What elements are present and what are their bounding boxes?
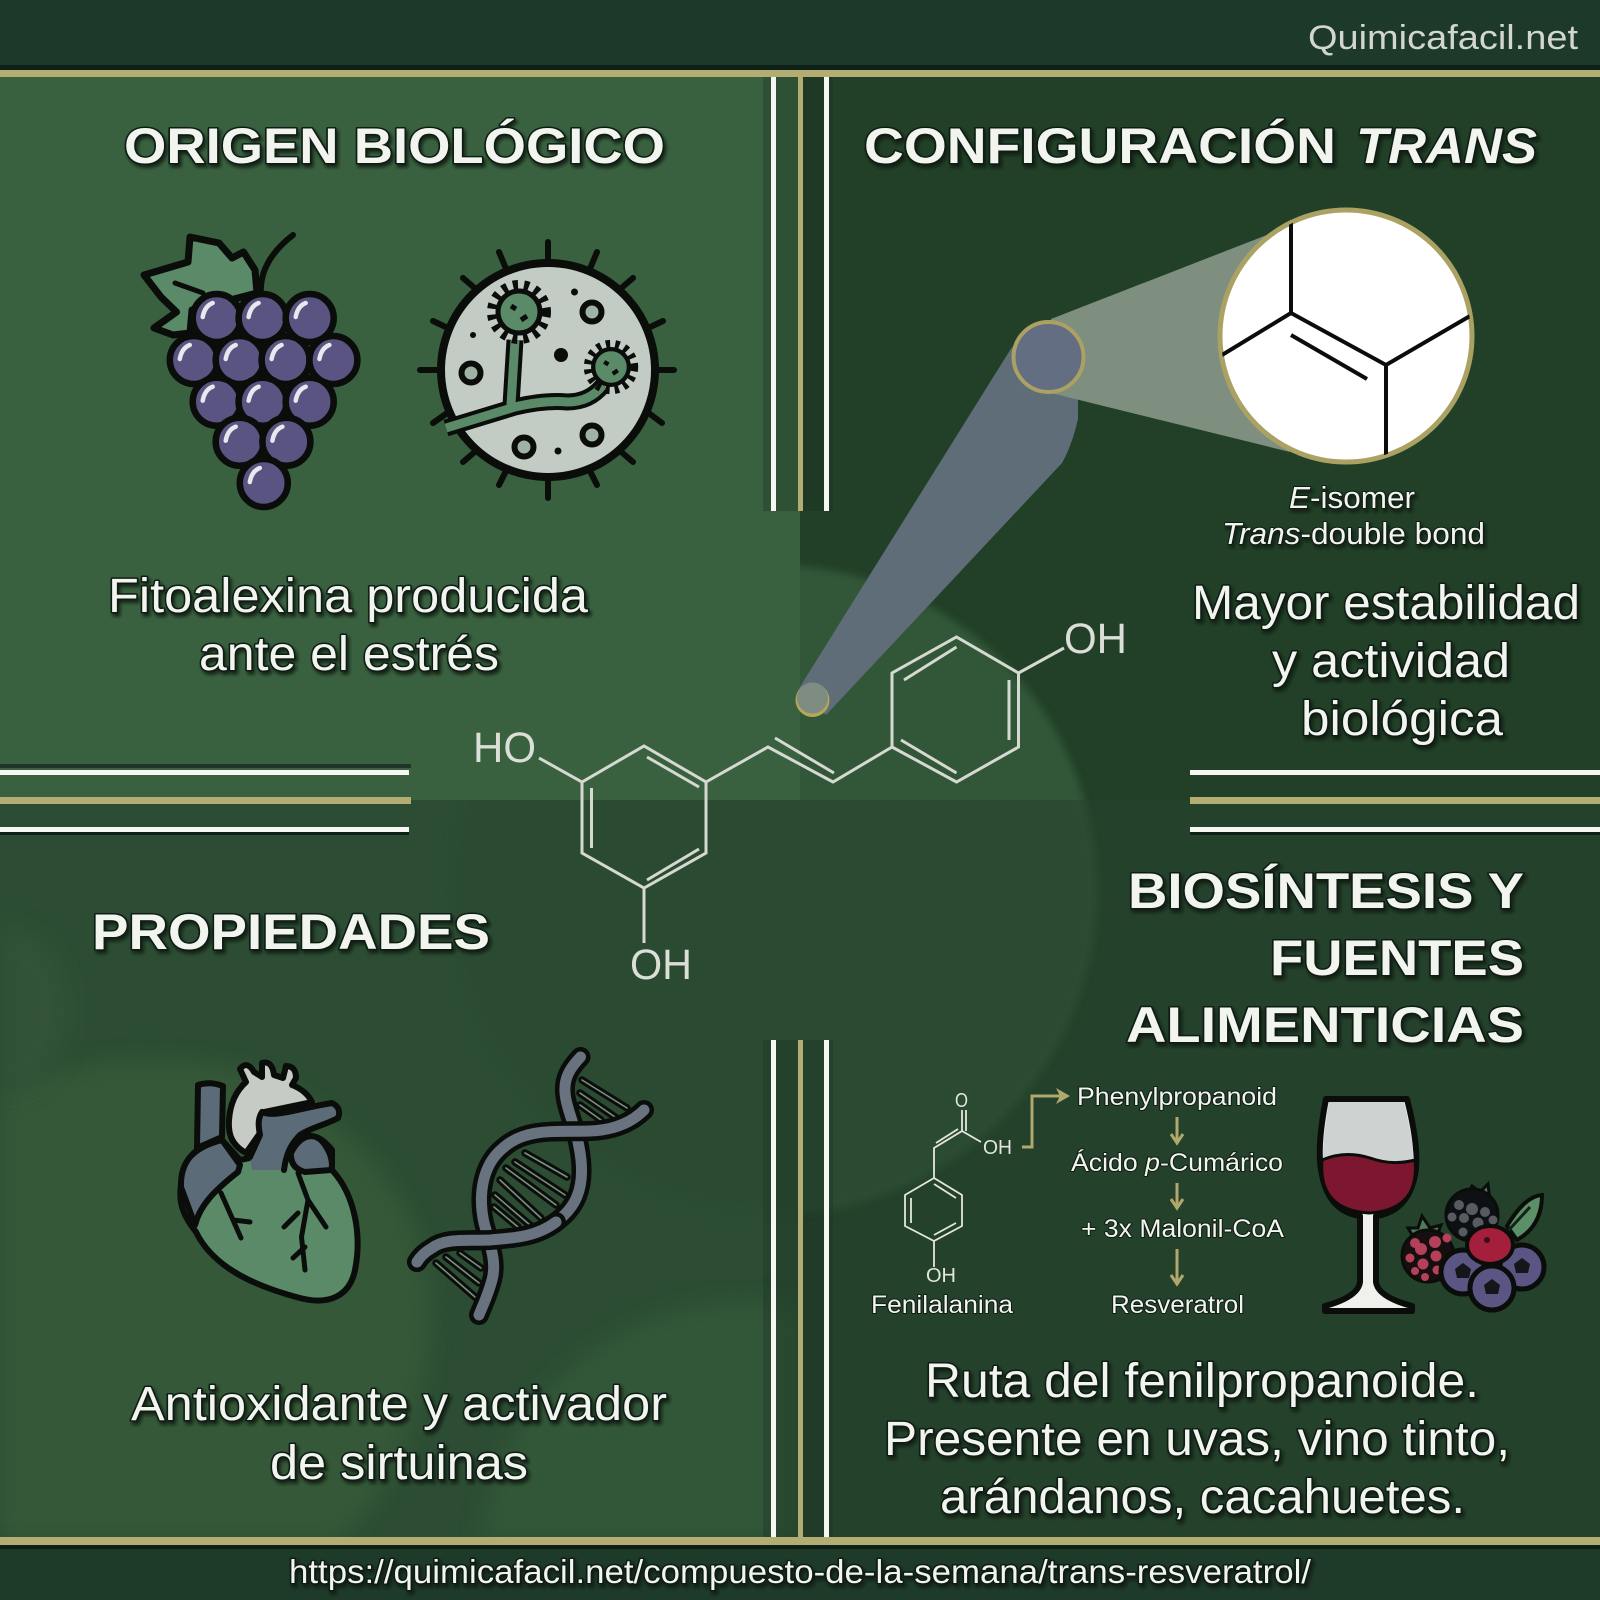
magnifier beam: lower (798, 347, 1078, 715)
text: antioxidante: Antioxidante y activador (131, 1378, 667, 1431)
label: E-isomer: E-isomer (1289, 480, 1415, 515)
heading: configuración trans: TRANS (1356, 118, 1537, 174)
text: antioxidante: de sirtuinas (270, 1437, 528, 1490)
label: E-isomer: Trans-double bond (1222, 516, 1485, 551)
text: fitoalexina (108, 570, 588, 681)
panel: origen biológico (108, 118, 674, 681)
text: mayor estabilidad: biológica (1301, 693, 1503, 746)
label: fenilalanina: Fenilalanina (871, 1291, 1013, 1319)
heading: configuración trans (864, 118, 1537, 174)
text: ruta: Presente en uvas, vino tinto, (884, 1413, 1510, 1466)
heading: biosíntesis: FUENTES (1270, 930, 1524, 986)
chemical structure: fenilalanina (905, 1090, 1012, 1287)
chemical structure: resveratrol: OH (1064, 615, 1127, 663)
chemical structure: resveratrol: HO (473, 724, 536, 772)
text: ruta: arándanos, cacahuetes. (940, 1471, 1465, 1524)
heading: biosíntesis: BIOSÍNTESIS Y (1128, 863, 1524, 919)
big lens: trans bond (1220, 210, 1472, 470)
chemical structure: fenilalanina: OH (926, 1265, 956, 1287)
pointer dot (796, 682, 830, 717)
pathway steps (1071, 1083, 1284, 1319)
arrow: to phenylpropanoid (1022, 1088, 1070, 1147)
small lens (1014, 322, 1084, 392)
panel: configuración trans (796, 118, 1580, 746)
pathway steps: Ácido p-Cumárico (1071, 1148, 1283, 1177)
text: mayor estabilidad: y actividad (1272, 635, 1510, 688)
site name: Quimicafacil.net (1308, 19, 1579, 57)
pathway steps: Resveratrol (1111, 1291, 1244, 1319)
text: antioxidante (131, 1378, 667, 1490)
icon: microbe (420, 242, 674, 498)
icon: wine glass (1320, 1099, 1416, 1311)
chemical structure: resveratrol: OH (630, 941, 692, 989)
icon: grapes (144, 235, 357, 507)
label: E-isomer (1222, 480, 1485, 551)
text: ruta: Ruta del fenilpropanoide. (925, 1355, 1479, 1408)
text: fitoalexina: Fitoalexina producida (108, 570, 588, 623)
pathway steps: Phenylpropanoid (1077, 1083, 1277, 1111)
pathway arrows (1171, 1117, 1183, 1284)
text: mayor estabilidad: Mayor estabilidad (1192, 577, 1580, 630)
icon: dna (417, 1057, 644, 1315)
pathway steps: + 3x Malonil-CoA (1081, 1215, 1284, 1243)
magnifier beam: upper (1051, 226, 1290, 452)
icon: heart (180, 1062, 358, 1301)
heading: propiedades: PROPIEDADES (92, 904, 490, 960)
heading: biosíntesis: ALIMENTICIAS (1126, 997, 1524, 1053)
footer url: https://quimicafacil.net/compuesto-de-la-semana/trans-resveratrol/ (289, 1553, 1312, 1590)
chemical structure: fenilalanina: O (955, 1090, 968, 1112)
text: mayor estabilidad (1192, 577, 1580, 746)
panel: biosíntesis (871, 863, 1544, 1524)
chemical structure: resveratrol (473, 615, 1127, 989)
panel: propiedades (92, 904, 667, 1490)
background (0, 77, 1096, 1537)
chemical structure: fenilalanina: OH (983, 1137, 1012, 1159)
heading: origen biológico: ORIGEN BIOLÓGICO (124, 118, 665, 174)
heading: biosíntesis (1126, 863, 1524, 1053)
icon: berries (1402, 1184, 1544, 1310)
text: ruta (884, 1355, 1510, 1524)
heading: configuración trans: CONFIGURACIÓN (864, 118, 1336, 174)
text: fitoalexina: ante el estrés (199, 628, 499, 681)
